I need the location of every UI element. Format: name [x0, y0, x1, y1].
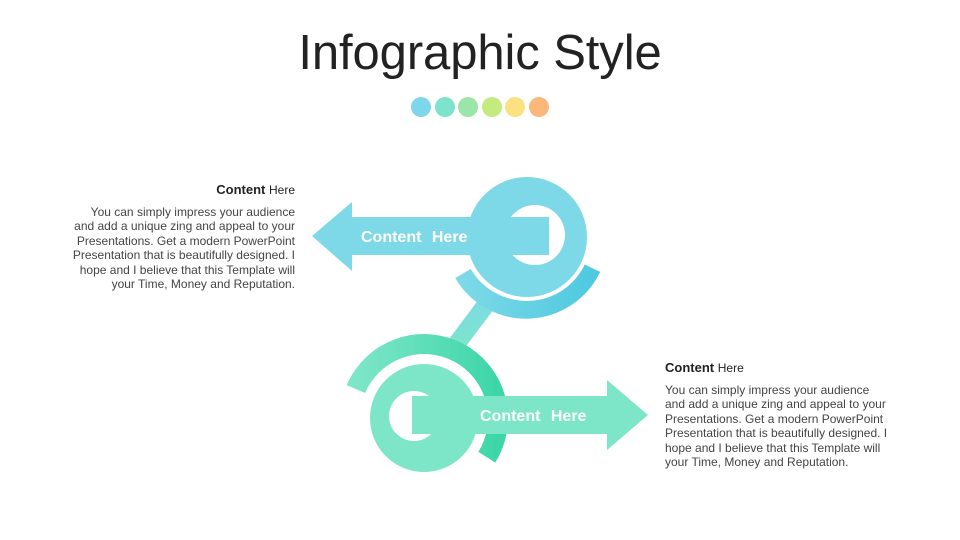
text: right: and add a unique zing and appeal to your — [665, 397, 886, 411]
text: left: and add a unique zing and appeal to your — [74, 219, 295, 233]
text: left: Presentations. Get a modern PowerPoint — [77, 234, 295, 248]
heading: left: Content Here — [216, 182, 295, 197]
text: left — [73, 205, 295, 291]
text: left: You can simply impress your audience — [91, 205, 295, 219]
top gear shape — [463, 173, 592, 310]
arrow: left — [312, 202, 549, 271]
title: Infographic Style — [298, 26, 662, 80]
arrow: right: Content Here — [480, 408, 587, 425]
text: left: your Time, Money and Reputation. — [112, 277, 295, 291]
arrow: right — [412, 380, 648, 450]
text: right: your Time, Money and Reputation. — [665, 455, 848, 469]
arrow: left: Content Here — [361, 229, 468, 246]
text: right: Presentation that is beautifully designed. I — [665, 426, 887, 440]
text: left: Presentation that is beautifully designed. I — [73, 248, 295, 262]
connector — [452, 294, 494, 350]
text: right — [665, 383, 887, 469]
text: right: hope and I believe that this Template will — [665, 441, 880, 455]
text: right: You can simply impress your audience — [665, 383, 869, 397]
dots — [411, 97, 549, 117]
bottom gear shape — [356, 344, 498, 476]
text: right: Presentations. Get a modern PowerPoint — [665, 412, 883, 426]
heading: right: Content Here — [665, 360, 744, 375]
text: left: hope and I believe that this Template will — [80, 263, 295, 277]
